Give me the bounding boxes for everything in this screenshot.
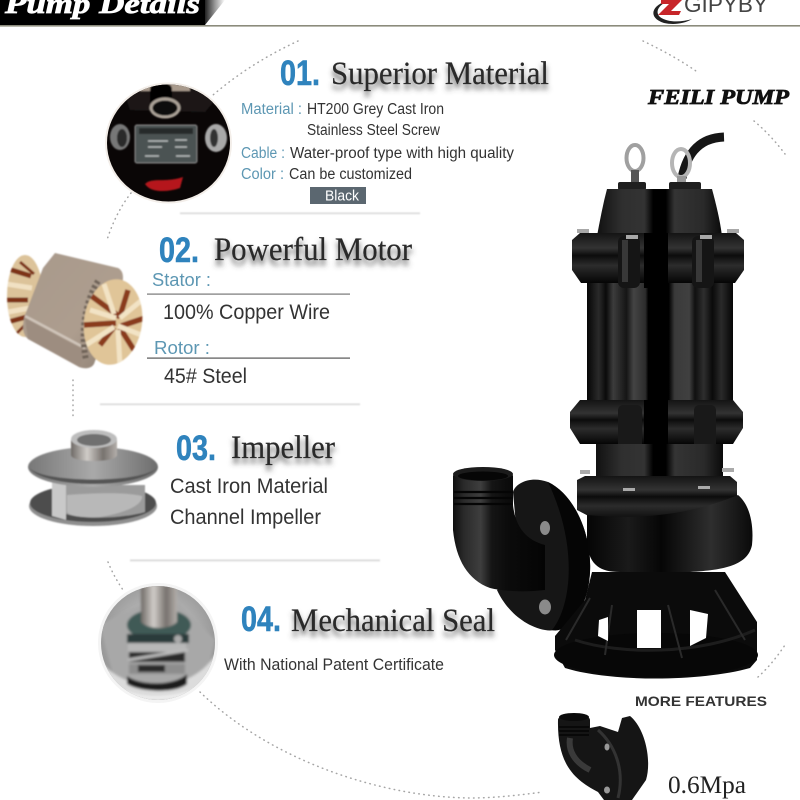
lower flange [570, 400, 743, 459]
spec: cable: Cable : [241, 145, 285, 162]
section dividers [100, 212, 420, 561]
heading superior material: Superior Material [331, 56, 549, 92]
spec: color: Can be customized [289, 166, 412, 183]
pressure label: 0.6Mpa [668, 772, 746, 799]
motor cap [597, 189, 722, 236]
more features label: MORE FEATURES [635, 694, 767, 709]
spec: rotor [147, 338, 350, 388]
spec: rotor: Rotor : [154, 338, 210, 358]
colour tag: black: Black [325, 188, 359, 204]
spec: material: Material : [241, 101, 302, 118]
colour tag: black [310, 187, 366, 204]
spec: material: Stainless Steel Screw [307, 122, 441, 139]
spec: rotor: 45# Steel [164, 365, 247, 388]
spec: stator: 100% Copper Wire [163, 301, 330, 324]
brand logo [653, 0, 768, 24]
spec: material [241, 101, 444, 139]
lifting eye bolts [618, 145, 701, 190]
small elbow illustration [558, 713, 648, 800]
heading number 03: 03. [176, 429, 216, 468]
panel: 01 superior material [105, 54, 549, 204]
heading number 04: 04. [241, 600, 281, 639]
lower flange ring [577, 468, 737, 522]
heading number 02: 02. [159, 231, 199, 270]
main pump illustration [453, 137, 758, 678]
motor body [587, 270, 733, 410]
heading mechanical seal: Mechanical Seal [291, 603, 495, 639]
heading powerful motor: Powerful Motor [214, 232, 412, 268]
spec: color: Color : [241, 166, 284, 183]
photo: control panel on pump top [105, 82, 232, 204]
upper flange [572, 229, 744, 288]
base windows [598, 610, 708, 648]
header bar [0, 0, 800, 27]
heading impeller: Impeller [231, 430, 335, 466]
spec: color [241, 166, 412, 183]
description: impeller: Channel Impeller [170, 506, 321, 529]
discharge elbow [453, 467, 551, 614]
panel: 03 impeller [28, 429, 335, 529]
panel: 02 powerful motor [4, 231, 412, 388]
brand label: feili pump: FEILI PUMP [647, 85, 789, 109]
spec: material: HT200 Grey Cast Iron [307, 101, 444, 118]
cable [682, 137, 724, 178]
spec: stator: Stator : [152, 270, 211, 290]
photo: stator [4, 253, 148, 369]
panel: 04 mechanical seal [98, 583, 495, 705]
spec: stator [147, 270, 350, 324]
photo: impeller [28, 430, 158, 526]
neck [596, 444, 723, 484]
pipe flange [497, 480, 590, 630]
description: impeller: Cast Iron Material [170, 475, 328, 498]
base stand [554, 572, 758, 678]
volute casing [587, 495, 752, 572]
description: impeller [170, 475, 328, 529]
description: patent: With National Patent Certificate [224, 656, 444, 674]
spec: cable: Water-proof type with high quality [290, 145, 514, 162]
photo: mechanical seal [98, 583, 218, 705]
heading number 01: 01. [280, 54, 320, 93]
